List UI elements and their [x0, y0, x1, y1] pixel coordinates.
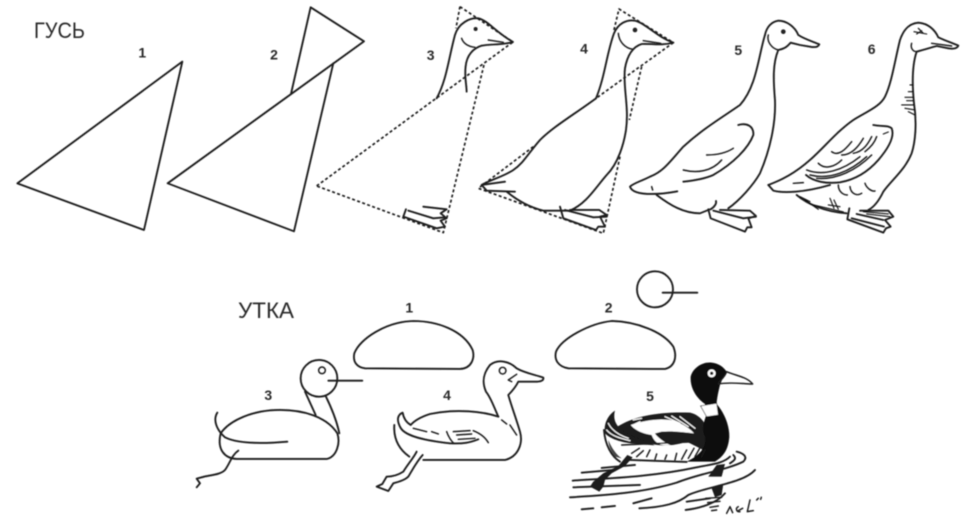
duck step 5: finished mallard on water: 5: [646, 388, 654, 404]
goose step 2: two triangles: 2: [270, 46, 278, 62]
goose step 4: outline over dotted triangles: [478, 9, 673, 233]
duck step 3: construction lines: 3: [264, 387, 272, 403]
goose step 1: triangle: [17, 44, 182, 230]
goose step 3: dotted triangles with head and feet: [317, 7, 513, 233]
duck step 3: construction lines: [197, 360, 362, 487]
reflection: [708, 464, 725, 497]
belly: [630, 460, 687, 462]
duck step 1: body shape: 1: [405, 299, 413, 315]
duck step 5: finished mallard on water: [570, 363, 761, 513]
artist signature: [727, 497, 761, 513]
head and chest: [687, 363, 729, 462]
beak: [718, 372, 753, 384]
tail: [605, 411, 655, 445]
duck step 4: outline with feathers and foot: 4: [443, 387, 451, 403]
goose step 5: outline with wing: 5: [734, 42, 742, 58]
back hatching and wing: [614, 412, 708, 450]
duck step 2: body and head circle with beak line: 2: [605, 300, 613, 316]
goose step 5: outline with wing: [630, 21, 819, 232]
goose step 4: outline over dotted triangles: 4: [580, 40, 588, 56]
heading: duck: УТКА: [238, 298, 294, 323]
goose step 6: finished goose with feathers: [768, 23, 958, 233]
duck step 2: body and head circle with beak line: [556, 271, 697, 369]
duck step 4: outline with feathers and foot: [377, 361, 543, 491]
goose step 1: triangle: 1: [138, 44, 146, 60]
foot: [590, 455, 633, 492]
duck step 1: body shape: [354, 299, 473, 369]
goose step 2: two triangles: [168, 7, 364, 231]
goose step 6: finished goose with feathers: 6: [868, 41, 876, 57]
heading: goose: ГУСЬ: [34, 18, 85, 43]
collar: [701, 403, 718, 417]
goose step 3: dotted triangles with head and feet: 3: [427, 47, 435, 63]
water ripples: [570, 452, 755, 510]
